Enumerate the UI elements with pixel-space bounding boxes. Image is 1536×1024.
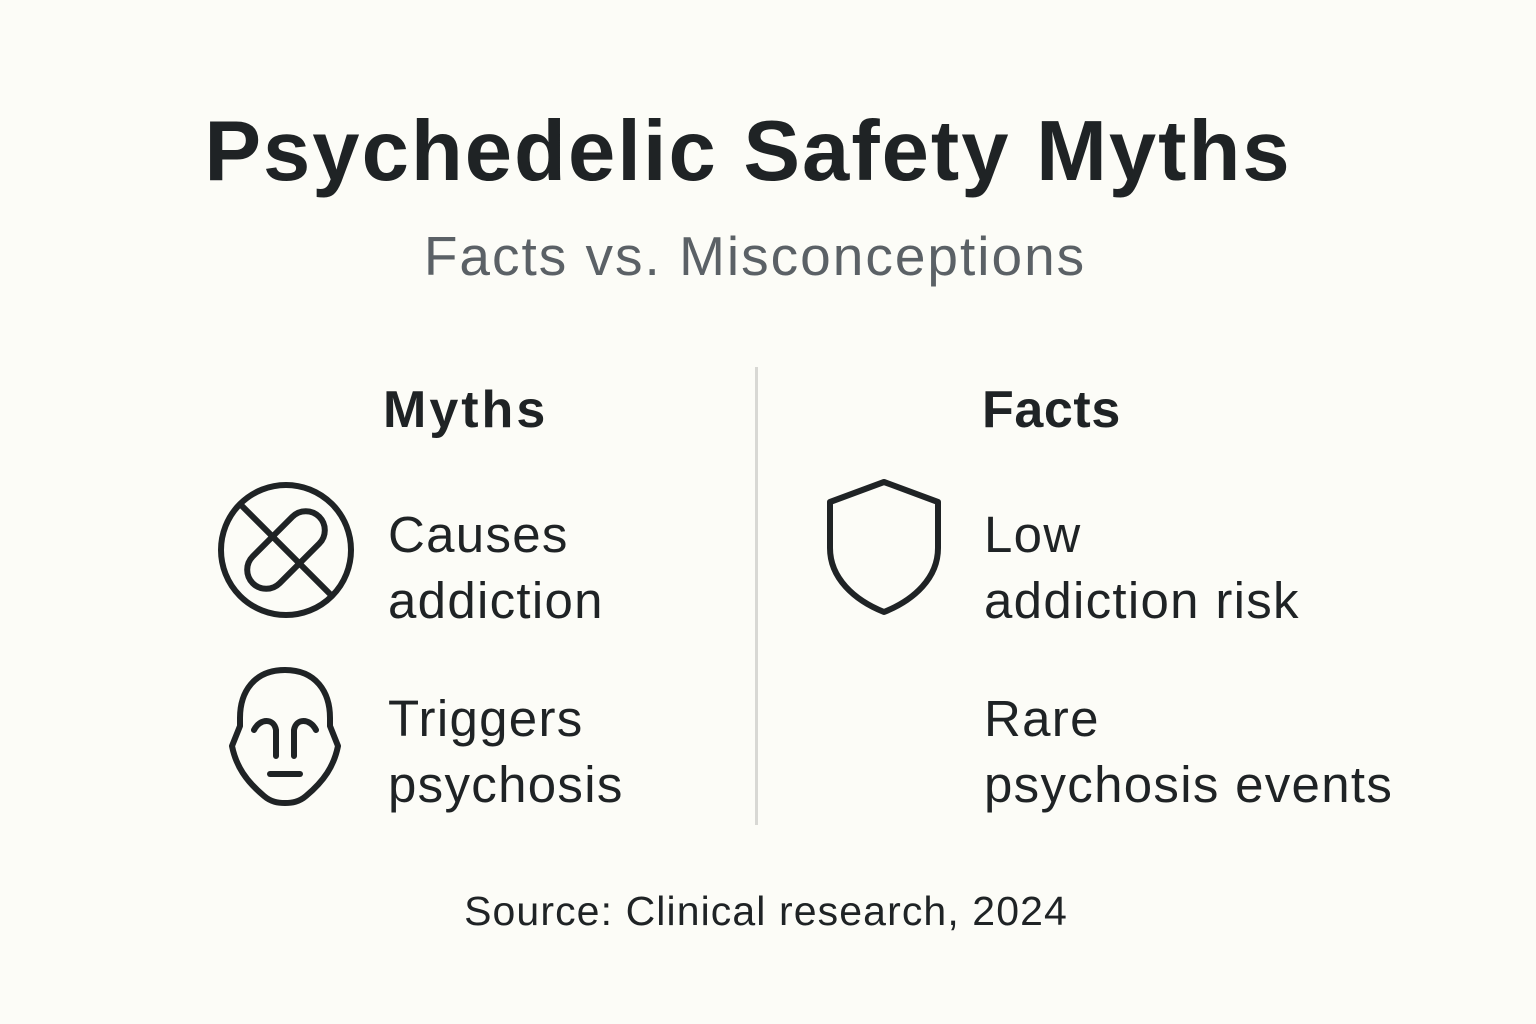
source: Source: Clinical research, 2024 [464, 888, 1068, 934]
divider [755, 367, 758, 825]
heading: Myths: Myths [383, 381, 548, 439]
text: causes addiction [388, 506, 604, 629]
text: rare psychosis events: Rare [984, 690, 1100, 747]
title: Psychedelic Safety Myths [204, 104, 1292, 199]
text: causes addiction: Causes [388, 506, 569, 563]
text: rare psychosis events [984, 690, 1393, 813]
text: triggers psychosis: Triggers [388, 690, 584, 747]
text: low addiction risk [984, 506, 1300, 629]
text: rare psychosis events: psychosis events [984, 756, 1393, 813]
text: low addiction risk: Low [984, 506, 1081, 563]
icon: face [229, 667, 341, 806]
subtitle: Facts vs. Misconceptions [424, 225, 1086, 287]
text: triggers psychosis: psychosis [388, 756, 624, 813]
heading: Facts: Facts [982, 381, 1121, 439]
text: triggers psychosis [388, 690, 624, 813]
icon: crossed-out pill [218, 482, 354, 618]
icon: shield [827, 479, 941, 615]
text: causes addiction: addiction [388, 572, 604, 629]
text: low addiction risk: addiction risk [984, 572, 1300, 629]
